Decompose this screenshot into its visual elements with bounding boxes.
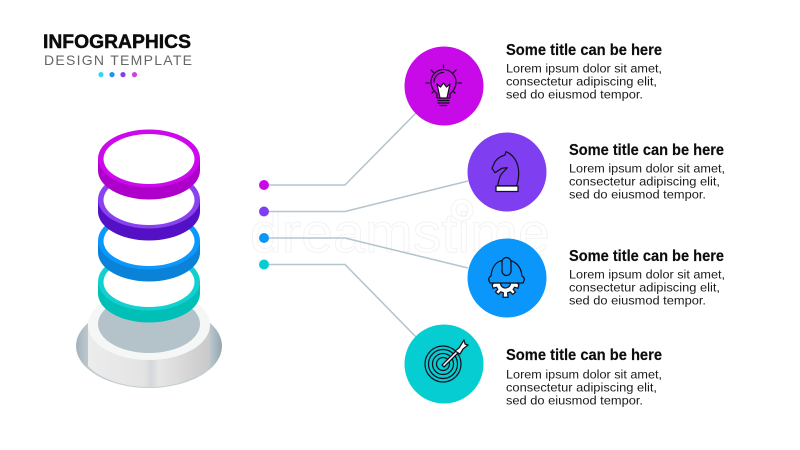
text block 4: Some title can be here bbox=[506, 347, 662, 364]
icon: target and arrow bbox=[425, 340, 468, 382]
text block 3: sed do eiusmod tempor. bbox=[569, 294, 706, 308]
text block 4: sed do eiusmod tempor. bbox=[506, 394, 643, 408]
icon: helmet and gear bbox=[489, 258, 524, 297]
text block 1: consectetur adipiscing elit, bbox=[506, 74, 657, 88]
text block 1 bbox=[506, 42, 662, 102]
connector: purple bbox=[259, 181, 468, 216]
text block 4 bbox=[506, 347, 662, 408]
stack base bbox=[76, 290, 222, 388]
text: dreamstime bbox=[250, 201, 550, 264]
text block 1: Some title can be here bbox=[506, 42, 662, 59]
step 3 circle with helmet icon bbox=[468, 238, 546, 318]
disc: teal bbox=[98, 252, 200, 322]
subtitle: DESIGN TEMPLATE bbox=[44, 52, 192, 68]
text block 2: Some title can be here bbox=[569, 142, 724, 159]
text block 2: Lorem ipsum dolor sit amet, bbox=[569, 162, 725, 176]
text block 1: sed do eiusmod tempor. bbox=[506, 88, 643, 102]
text block 4: consectetur adipiscing elit, bbox=[506, 380, 657, 394]
disc: magenta bbox=[98, 130, 200, 200]
connector: magenta bbox=[259, 113, 416, 190]
title block bbox=[43, 32, 192, 77]
disc: blue bbox=[98, 212, 200, 282]
decorative colour dots bbox=[98, 72, 137, 77]
text block 2: consectetur adipiscing elit, bbox=[569, 174, 720, 188]
step 1 circle with bulb icon bbox=[404, 46, 484, 126]
connector: blue bbox=[259, 233, 468, 268]
text block 1: Lorem ipsum dolor sit amet, bbox=[506, 62, 662, 76]
icon: chess knight bbox=[492, 152, 519, 192]
isometric disc stack bbox=[76, 130, 222, 388]
step 2 circle with knight icon bbox=[468, 132, 546, 212]
text block 3: consectetur adipiscing elit, bbox=[569, 280, 720, 294]
text block 2: sed do eiusmod tempor. bbox=[569, 188, 706, 202]
connector: teal bbox=[259, 260, 416, 337]
icon: light bulb bbox=[426, 65, 462, 106]
disc: purple bbox=[98, 170, 200, 240]
text block 3 bbox=[569, 248, 725, 308]
text block 2 bbox=[569, 142, 725, 202]
text block 3: Lorem ipsum dolor sit amet, bbox=[569, 268, 725, 282]
text block 3: Some title can be here bbox=[569, 248, 724, 265]
title: INFOGRAPHICS bbox=[43, 32, 191, 53]
step 4 circle with target icon bbox=[404, 324, 484, 404]
text block 4: Lorem ipsum dolor sit amet, bbox=[506, 368, 662, 382]
